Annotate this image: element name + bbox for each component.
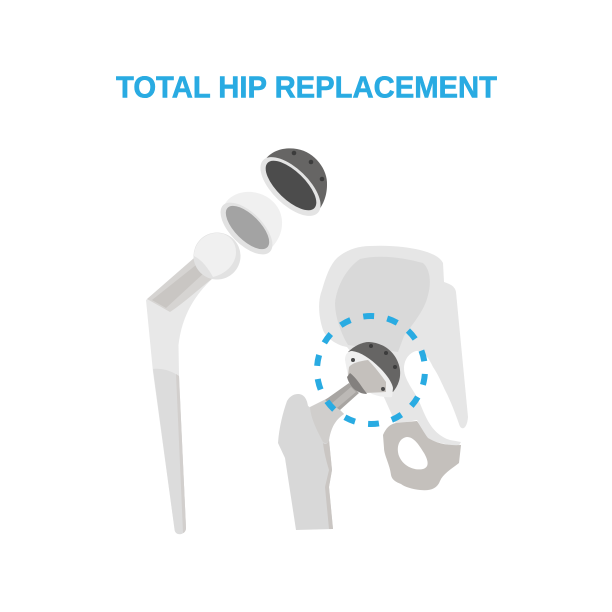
title: TOTAL HIP REPLACEMENT (116, 70, 497, 104)
icon: implanted prosthesis (325, 342, 400, 410)
icon: pelvis bone (319, 246, 468, 490)
icon: femoral stem with ball head (146, 232, 240, 534)
icon: metal acetabular cup (251, 147, 330, 226)
dashed highlight circle (317, 316, 425, 424)
icon: femur bone (278, 394, 344, 530)
icon: polyethylene liner (212, 192, 282, 263)
